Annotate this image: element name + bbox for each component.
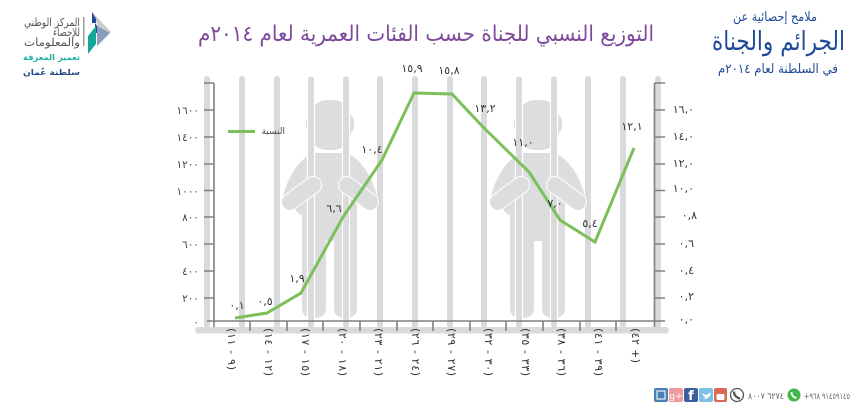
icon: instagram <box>654 388 668 402</box>
x axis category labels: (١١ - ٩) <box>225 328 238 370</box>
data labels: ١٢,١ <box>621 120 643 133</box>
logo divider <box>83 17 84 46</box>
right axis labels: ٠,٦ <box>679 237 694 250</box>
data labels: ١,٩ <box>289 272 305 285</box>
data labels: ١٣,٢ <box>474 102 496 115</box>
x axis category labels: (٤٢ +) <box>629 328 642 363</box>
title: التوزيع النسبي للجناة حسب الفئات العمرية لعام ٢٠١٤م <box>198 22 654 47</box>
icon: youtube <box>714 388 727 402</box>
right axis labels: ١٠,٠ <box>673 182 694 195</box>
left axis labels: ١٠٠٠ <box>176 186 199 198</box>
logo country name: سلطنة عُمان <box>23 68 80 77</box>
x axis category labels <box>225 328 642 376</box>
right axis labels: ٠,٨ <box>682 209 697 222</box>
prison bars <box>195 76 669 334</box>
logo icon <box>88 12 111 54</box>
header panel: crimes and offenders <box>712 10 845 77</box>
icon: facebook: f <box>688 389 694 404</box>
data labels: ٦,٦ <box>326 202 342 215</box>
left axis labels: ١٢٠٠ <box>176 159 199 171</box>
x axis category labels: (٣٨ - ٣٦) <box>555 328 568 376</box>
left axis labels: ١٦٠٠ <box>176 105 199 117</box>
data labels: ١١,٠ <box>512 136 534 149</box>
figure: right prisoner body <box>491 100 585 318</box>
x axis category labels: (٢٠ - ١٨) <box>336 328 349 376</box>
x axis category labels: (٢٩ - ٢٧) <box>445 328 458 376</box>
figure: right prisoner arms <box>498 185 578 202</box>
header line 1: ملامح إحصائية عن <box>733 10 817 25</box>
left axis labels: ٤٠٠ <box>182 266 199 278</box>
right axis labels: ٠,٤ <box>679 264 694 277</box>
icon: facebook <box>684 388 698 404</box>
data labels: ١٠,٤ <box>361 143 383 156</box>
figure: left prisoner arms <box>290 185 370 202</box>
left axis labels: ٨٠٠ <box>182 212 199 224</box>
left axis labels: ٠ <box>193 317 199 329</box>
x axis category labels: (٣٥ - ٣٣) <box>519 328 532 376</box>
right axis labels: ١٢,٠ <box>673 157 694 170</box>
data labels: ٠,١ <box>229 299 245 312</box>
header line 3: في السلطنة لعام ٢٠١٤م <box>718 62 838 77</box>
data labels: ١٥,٨ <box>438 64 460 77</box>
data labels: ٧,٠ <box>547 197 563 210</box>
x axis category labels: (١٤ - ١٢) <box>262 328 275 376</box>
logo text: organisation name: والمعلومات <box>24 36 80 49</box>
right axis labels: ٠,٠ <box>679 313 694 326</box>
data labels <box>229 62 643 312</box>
data labels: ١٥,٩ <box>401 62 423 75</box>
logo text: organisation name: المركز الوطني <box>24 16 80 29</box>
footer contact bar <box>654 388 850 404</box>
icon: twitter <box>699 388 713 402</box>
logo text: organisation name <box>24 16 80 49</box>
right axis labels <box>673 103 697 326</box>
data labels: ٥,٤ <box>582 217 598 230</box>
figure: left prisoner body <box>283 100 377 318</box>
logo tagline: تعمير المعرفة <box>23 53 80 62</box>
logo <box>23 12 111 77</box>
icon: google plus: g+ <box>669 392 683 402</box>
whatsapp number: +٩٦٨ ٩١٤٥٩١٤٥ <box>804 392 850 402</box>
right axis labels: ٠,٢ <box>679 290 694 303</box>
data line: share of offenders <box>235 93 634 318</box>
data labels: ٠,٥ <box>257 295 273 308</box>
icon: whatsapp <box>788 388 800 402</box>
left axis labels: ٦٠٠ <box>182 239 199 251</box>
left axis labels: ١٤٠٠ <box>176 132 199 144</box>
right axis <box>654 83 665 327</box>
x axis category labels: (٣٢ - ٣٠) <box>482 328 495 376</box>
icon: google plus <box>669 388 683 402</box>
x axis <box>207 321 665 331</box>
chart <box>176 62 697 376</box>
x axis category labels: (٢٣ - ٢١) <box>372 328 385 376</box>
right axis labels: ١٤,٠ <box>673 130 694 143</box>
legend <box>228 127 285 137</box>
right axis labels: ١٦,٠ <box>673 103 694 116</box>
left axis labels: ٢٠٠ <box>182 293 199 305</box>
left axis labels <box>176 105 199 329</box>
icon: phone <box>730 388 744 402</box>
x axis category labels: (١٧ - ١٥) <box>299 328 312 376</box>
x axis category labels: (٢٦ - ٢٤) <box>409 328 422 376</box>
logo text: organisation name: للإحصاء <box>53 26 80 39</box>
legend: النسبة <box>261 127 285 137</box>
left axis <box>204 83 214 327</box>
x axis category labels: (٤١ - ٣٩) <box>592 328 605 376</box>
phone number: ٨٠٠٧ ٦٢٧٤ <box>748 392 784 402</box>
